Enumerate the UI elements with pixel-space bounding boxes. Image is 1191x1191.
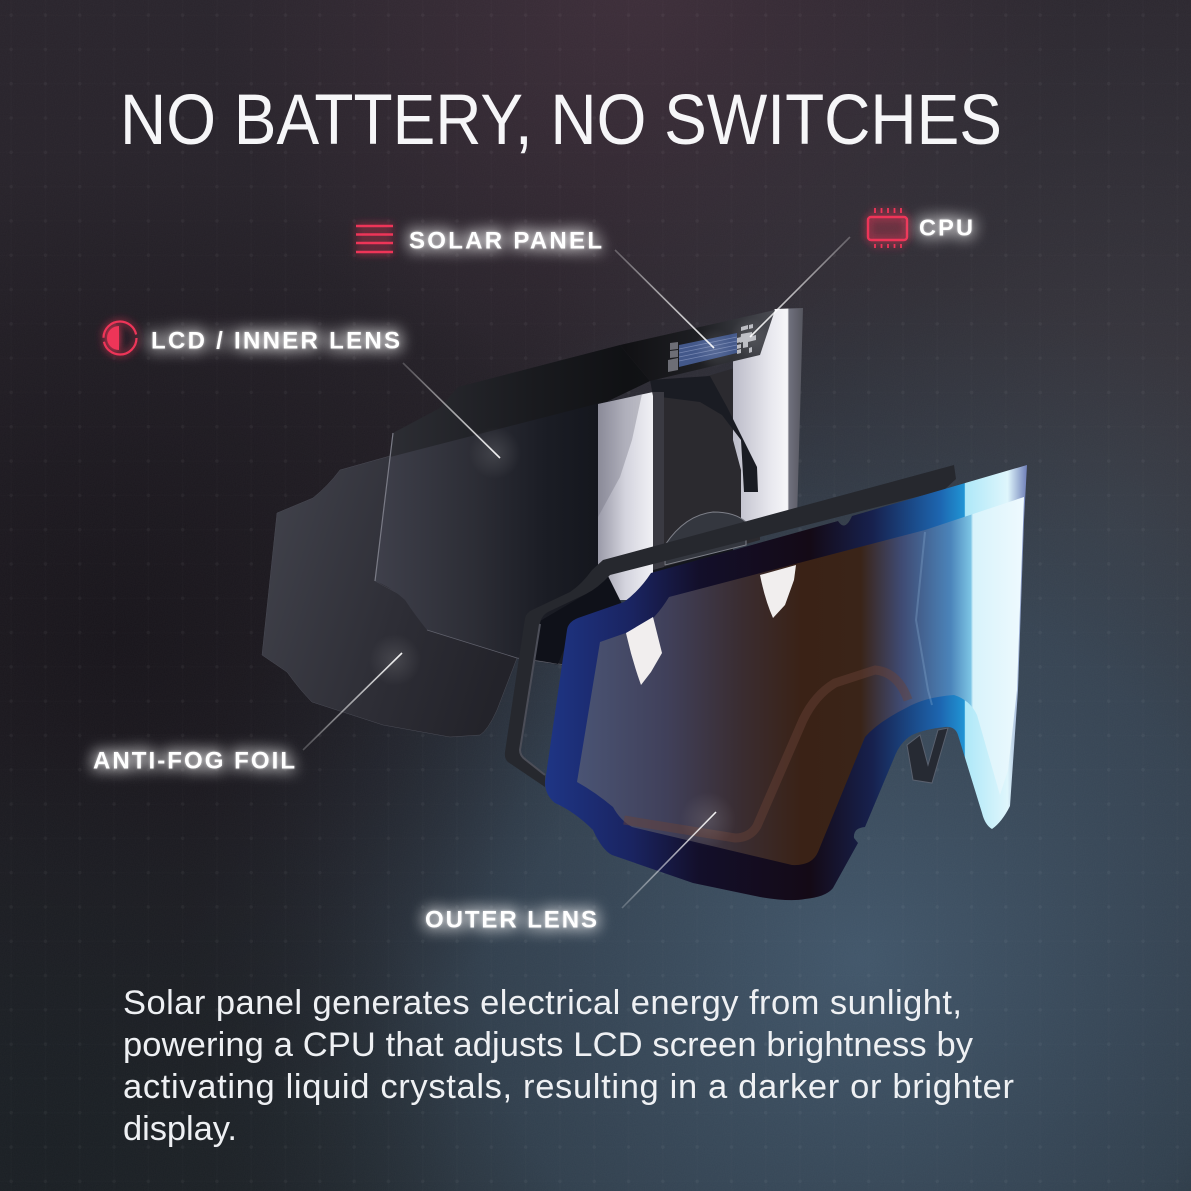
lens clear window (577, 497, 1024, 865)
silver reflection right (733, 308, 803, 540)
middle dark section (653, 368, 760, 570)
icon: lcd half circle (104, 322, 136, 354)
icon: cpu chip (868, 208, 907, 248)
white reflection shard left (626, 617, 662, 685)
title: NO BATTERY, NO SWITCHES (120, 81, 1002, 160)
description text (123, 984, 1014, 1148)
anti-fog foil layer (262, 456, 517, 737)
frame inner highlight (520, 624, 545, 775)
headband edge of inner lens (390, 345, 650, 457)
right contour reflection (916, 532, 932, 705)
nose piece of frame (907, 728, 948, 783)
goggle frame (505, 465, 956, 787)
pointer line: solar panel (615, 250, 734, 368)
goggles exploded illustration (262, 308, 1027, 900)
pointer line: anti-fog foil (303, 634, 421, 750)
description text: powering a CPU that adjusts LCD screen brightness by (123, 1026, 974, 1064)
solar and cpu module (620, 310, 775, 381)
description text: display. (123, 1110, 237, 1148)
pointer line: lcd (403, 363, 521, 479)
nose plate arc (665, 512, 746, 565)
contact pads (668, 342, 678, 372)
pointer line: cpu (730, 237, 850, 357)
dark area inside frame (522, 574, 622, 664)
cpu chips (737, 324, 756, 354)
icon: solar panel lines (356, 226, 393, 252)
label: cpu: CPU (919, 214, 973, 240)
inner lens body (375, 370, 733, 668)
description text: Solar panel generates electrical energy from sunlight, (123, 984, 962, 1022)
inner nose contour (624, 670, 908, 838)
outer lens (545, 465, 1027, 900)
label: lcd / inner lens: LCD / INNER LENS (151, 328, 400, 354)
pointer line: outer lens (622, 792, 736, 908)
description text: activating liquid crystals, resulting in a darker or brighter (123, 1068, 1014, 1106)
label: solar panel: SOLAR PANEL (409, 228, 602, 254)
lens rim (545, 465, 1027, 900)
label: anti-fog foil: ANTI-FOG FOIL (93, 748, 295, 774)
white reflection shard right (760, 565, 796, 618)
dark drape shape (650, 376, 758, 492)
silver reflection left (598, 392, 653, 600)
label: outer lens: OUTER LENS (425, 906, 597, 934)
LCD inner lens layer (375, 308, 803, 670)
solar cells (679, 333, 737, 367)
